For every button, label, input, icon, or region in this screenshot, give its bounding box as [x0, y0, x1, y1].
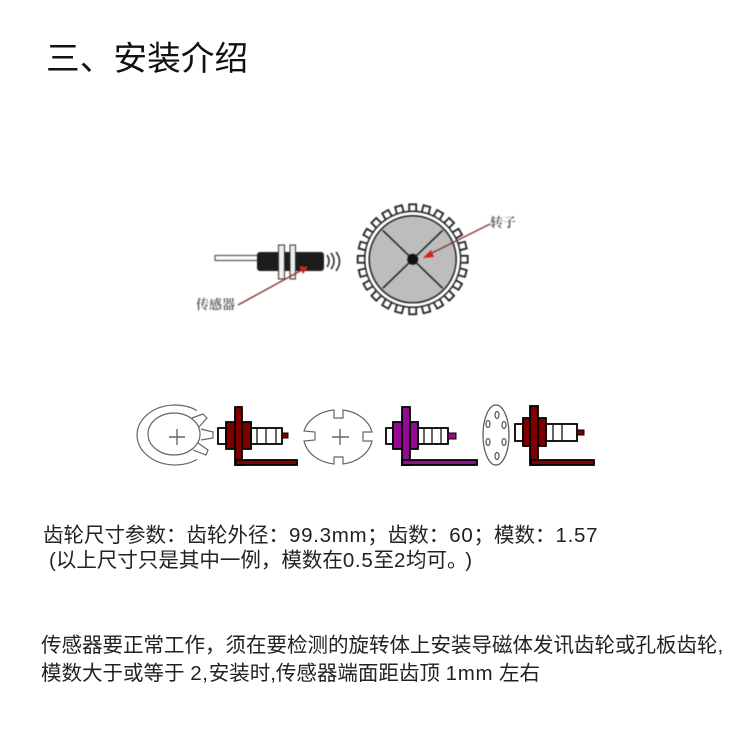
label: rotor: 转子: [490, 215, 516, 230]
label: sensor: 传感器: [196, 297, 235, 312]
icon: sensor: [215, 245, 340, 279]
icon: toothed rotor: [358, 204, 468, 314]
text: dimensions note: (以上尺寸只是其中一例，模数在0.5至2均可。 ): [49, 549, 472, 572]
icon: toothed wheel with three teeth: [137, 405, 213, 465]
text: installation distance: 模数大于或等于 2,安装时,传感器端面距齿顶 1mm 左右: [41, 662, 540, 685]
icon: dark red sensor assembly 1: [218, 407, 297, 465]
icon: dark red sensor assembly 2: [515, 406, 594, 465]
label: sensor callout arrow: [238, 266, 308, 305]
title: 三、安装介绍: [46, 40, 248, 78]
icon: purple sensor assembly: [386, 407, 477, 465]
text: gear dimensions: 齿轮尺寸参数：齿轮外径：99.3mm；齿数：60；模数：1.57: [43, 518, 598, 548]
icon: perforated disc: [483, 405, 509, 465]
label: rotor callout arrow: [423, 224, 490, 258]
text: installation requirements: 传感器要正常工作，须在要检测的旋转体上安装导磁体发讯齿轮或孔板齿轮,: [41, 634, 723, 657]
icon: notched disc: [304, 410, 372, 464]
